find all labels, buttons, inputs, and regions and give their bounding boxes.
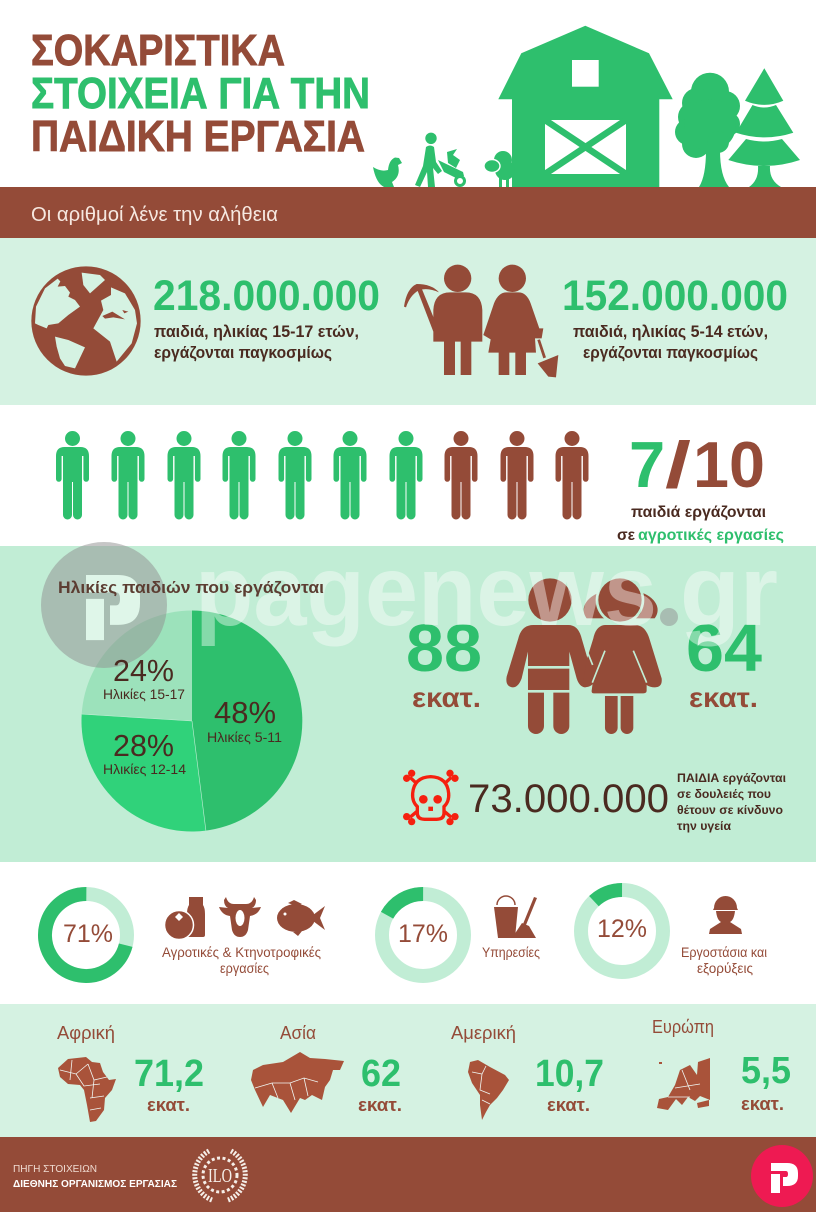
stat: 152 million	[562, 272, 788, 362]
region: Americas	[451, 1023, 604, 1120]
source text: ΔΙΕΘΝΗΣ ΟΡΓΑΝΙΣΜΟΣ ΕΡΓΑΣΙΑΣ	[13, 1178, 177, 1190]
heading: ages of working children: Ηλικίες παιδιών που εργάζονται	[58, 578, 324, 597]
caption: hazardous work: ΠΑΙΔΙΑ εργάζονται	[677, 771, 786, 785]
title: ΣΟΚΑΡΙΣΤΙΚΑ	[31, 26, 285, 75]
region: Africa: 71,2	[134, 1053, 204, 1095]
caption: hazardous work	[677, 771, 786, 833]
caption: hazardous work: την υγεία	[677, 819, 732, 833]
logo: ILO: ILO	[208, 1165, 232, 1187]
pie labels: Ηλικίες 5-11	[207, 729, 282, 745]
stat: boys 88 million: 88	[406, 611, 482, 686]
watermark: pagenews.gr	[41, 535, 778, 668]
region: Europe: εκατ.	[741, 1094, 784, 1114]
panel: sectors	[0, 862, 816, 1004]
donut: 12%	[564, 873, 680, 989]
region: Europe: 5,5	[741, 1050, 791, 1092]
pie labels: Ηλικίες 12-14	[103, 761, 186, 777]
stat: 7/10: 7	[629, 428, 665, 501]
source text: ΠΗΓΗ ΣΤΟΙΧΕΙΩΝ	[13, 1164, 97, 1175]
donut: 17%	[367, 879, 479, 991]
stat: 218 million	[153, 272, 380, 362]
watermark: pagenews.gr: pagenews	[195, 535, 657, 647]
panel: regions	[0, 1004, 816, 1137]
title: ΣΤΟΙΧΕΙΑ ΓΙΑ ΤΗΝ	[31, 69, 370, 118]
caption: agricultural work	[617, 504, 784, 544]
caption: factories and mining	[681, 945, 767, 976]
panel: subtitle banner	[0, 187, 816, 238]
icon: boy and girl holding hands	[506, 576, 662, 734]
panel: ages and gender	[0, 546, 816, 862]
caption: hazardous work: θέτουν σε κίνδυνο	[677, 803, 783, 817]
stat: 218 million: 218.000.000	[153, 272, 380, 320]
icon: chicken	[373, 158, 402, 187]
pie labels	[103, 653, 282, 777]
pie labels: 24%	[113, 653, 174, 688]
region: Europe: Ευρώπη	[652, 1017, 714, 1037]
pie labels: 48%	[214, 695, 276, 730]
caption: agriculture: εργασίες	[220, 961, 269, 976]
region: Americas: 10,7	[535, 1053, 604, 1095]
panel: header	[0, 0, 816, 187]
donut: 71%: 71%	[63, 920, 113, 948]
icons: tomato, bottle, cow, fish	[164, 897, 325, 940]
icon: farmer with wheelbarrow	[415, 133, 464, 187]
panel: global totals	[0, 238, 816, 405]
icon: barn	[498, 26, 673, 187]
panel: footer	[0, 1137, 816, 1212]
stat: 7/10	[629, 428, 765, 501]
region: Europe	[652, 1017, 791, 1114]
donut: 12%: 12%	[597, 915, 647, 943]
logo: ILO	[195, 1151, 245, 1200]
caption: agriculture	[162, 945, 321, 976]
region: Africa	[57, 1023, 204, 1122]
icon: pine tree	[728, 68, 800, 187]
stat: girls 64 million: 64	[686, 611, 762, 686]
region: Africa: εκατ.	[147, 1095, 190, 1115]
icon: children with pickaxe and shovel	[404, 265, 558, 377]
icon: construction worker	[709, 896, 742, 934]
region: Asia	[251, 1023, 402, 1115]
pictogram row of ten children	[56, 431, 588, 520]
title	[31, 26, 370, 161]
logo: pagenews P	[751, 1145, 813, 1207]
icon: bucket and broom	[494, 896, 537, 938]
icon: globe	[31, 266, 141, 376]
region: Americas: εκατ.	[547, 1095, 590, 1115]
caption: hazardous work: σε δουλειές που	[677, 787, 771, 801]
region: Africa: Αφρική	[57, 1023, 115, 1043]
region: Asia: Ασία	[280, 1023, 316, 1043]
stat: 152 million: εργάζονται παγκοσμίως	[583, 344, 758, 362]
stat: 218 million: παιδιά, ηλικίας 15-17 ετών,	[154, 323, 359, 341]
caption: factories and mining: εξορύξεις	[697, 961, 753, 976]
stat: 7/10: /	[665, 428, 691, 501]
region: Asia: 62	[361, 1053, 401, 1095]
donut: 71%	[36, 885, 136, 985]
pie labels: Ηλικίες 15-17	[103, 686, 185, 702]
region: Americas: Αμερική	[451, 1023, 516, 1043]
icon: leafy tree	[675, 73, 740, 187]
stat: 73 million: 73.000.000	[468, 777, 669, 821]
donut: 17%: 17%	[398, 920, 448, 948]
pie labels: 28%	[113, 728, 174, 763]
caption: agricultural work: σε	[617, 527, 636, 544]
title: ΠΑΙΔΙΚΗ ΕΡΓΑΣΙΑ	[31, 112, 365, 161]
pie chart: ages	[81, 610, 302, 831]
stat: 218 million: εργάζονται παγκοσμίως	[154, 344, 332, 362]
panel: seven in ten	[0, 405, 816, 546]
icon: sheep	[484, 151, 515, 187]
stat: 152 million: παιδιά, ηλικίας 5-14 ετών,	[573, 323, 768, 341]
caption: factories and mining: Εργοστάσια και	[681, 945, 767, 960]
stat: boys 88 million: εκατ.	[412, 682, 481, 713]
stat: 152 million: 152.000.000	[562, 272, 788, 320]
caption: agricultural work: παιδιά εργάζονται	[631, 504, 766, 521]
stat: 7/10: 10	[693, 428, 765, 501]
source text	[13, 1164, 177, 1190]
banner text: Οι αριθμοί λένε την αλήθεια	[31, 204, 278, 226]
region: Asia: εκατ.	[358, 1095, 402, 1115]
caption: agriculture: Αγροτικές & Κτηνοτροφικές	[162, 945, 321, 960]
caption: agricultural work: αγροτικές εργασίες	[638, 527, 784, 544]
watermark: pagenews.gr: gr	[680, 535, 778, 647]
caption: services: Υπηρεσίες	[482, 945, 540, 960]
stat: girls 64 million: εκατ.	[689, 682, 758, 713]
icon: skull and crossbones	[403, 770, 459, 825]
